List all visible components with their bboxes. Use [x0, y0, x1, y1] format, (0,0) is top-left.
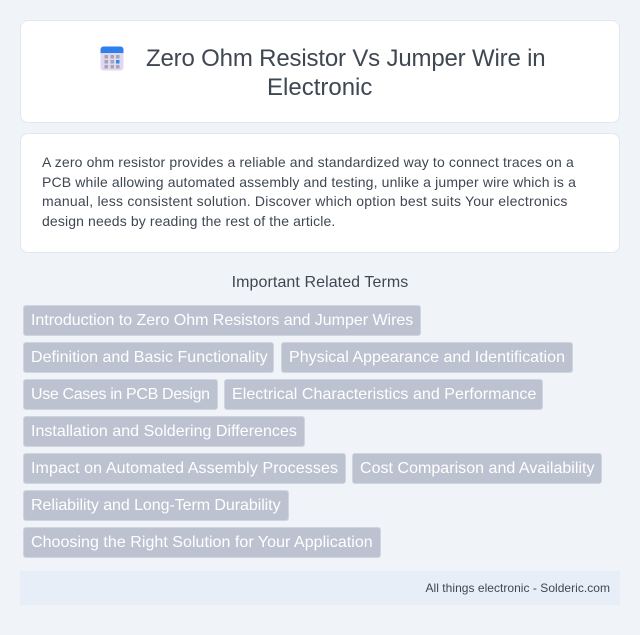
title — [146, 45, 545, 101]
text block: introduction — [42, 154, 576, 229]
panel: title card — [20, 20, 620, 123]
panel: introduction — [20, 133, 620, 253]
tag — [23, 453, 346, 484]
text block: introduction: PCB while allowing automated assembly and testing, unlike a jumper wire which is a — [42, 174, 576, 190]
tag: Physical Appearance and Identification — [289, 349, 565, 366]
tag: Use Cases in PCB Design — [31, 386, 210, 403]
tag: Impact on Automated Assembly Processes — [31, 460, 338, 477]
footer text: All things electronic - Solderic.com — [426, 581, 610, 595]
tag list — [23, 305, 602, 558]
text block: introduction: design needs by reading the rest of the article. — [42, 213, 335, 229]
tag: Introduction to Zero Ohm Resistors and Jumper Wires — [31, 312, 413, 329]
tag: Reliability and Long-Term Durability — [31, 497, 281, 514]
heading: related terms: Important Related Terms — [232, 274, 408, 291]
tag — [23, 527, 381, 558]
tag — [23, 416, 305, 447]
tag — [23, 305, 421, 336]
tag: Electrical Characteristics and Performance — [232, 386, 536, 403]
tag — [281, 342, 573, 373]
text block: introduction: manual, less consistent solution. Discover which option best suits Your electronics — [42, 193, 568, 209]
icon: calendar — [100, 46, 124, 70]
tag — [23, 490, 289, 521]
tag — [23, 379, 218, 410]
tag: Definition and Basic Functionality — [31, 349, 268, 366]
footer — [20, 571, 620, 605]
title: Electronic — [267, 74, 372, 101]
tag — [224, 379, 543, 410]
title: Zero Ohm Resistor Vs Jumper Wire in — [146, 45, 545, 72]
tag: Choosing the Right Solution for Your Application — [31, 534, 373, 551]
tag: Installation and Soldering Differences — [31, 423, 297, 440]
text block: introduction: A zero ohm resistor provides a reliable and standardized way to connect traces on a — [42, 154, 574, 170]
tag — [352, 453, 602, 484]
tag — [23, 342, 274, 373]
tag: Cost Comparison and Availability — [360, 460, 595, 477]
